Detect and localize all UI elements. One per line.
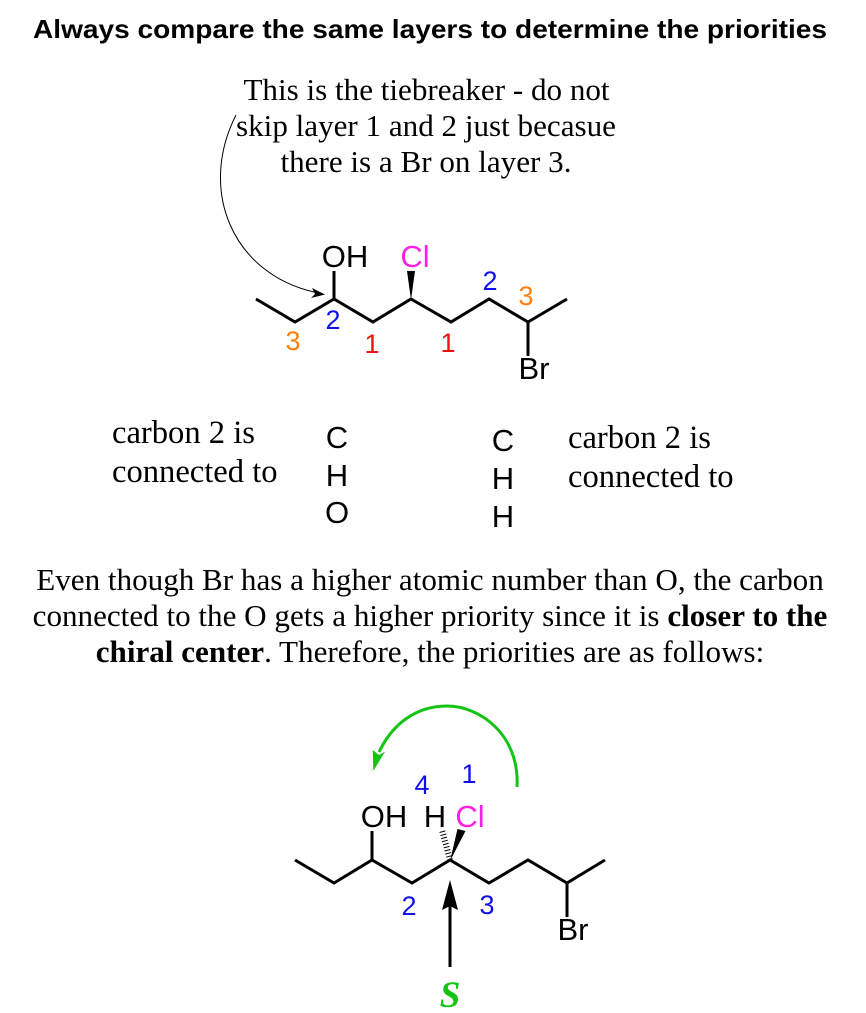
carbon skeleton	[295, 831, 605, 917]
wedge bond to Cl	[407, 271, 415, 300]
atom label: H: H	[424, 799, 446, 834]
text block: right carbon label	[568, 420, 734, 495]
text block: explanation	[33, 562, 827, 669]
text block: explanation: Even though Br has a higher atomic number than O, the carbon	[36, 562, 824, 597]
layer numbers: 3	[518, 281, 534, 311]
text block: tiebreaker note: This is the tiebreaker - do not	[243, 72, 610, 107]
atom label: OH: OH	[322, 239, 368, 274]
text block: left carbon label: carbon 2 is	[112, 415, 255, 451]
atom list: C H H: H	[492, 499, 514, 534]
arrow: green rotation arc	[373, 706, 517, 787]
text block: right carbon label: connected to	[568, 459, 734, 495]
priority numbers: 2	[401, 891, 417, 921]
wedge bond to Cl	[450, 829, 466, 861]
text block: left carbon label: connected to	[112, 454, 278, 490]
atom list: C H O: C	[326, 420, 348, 455]
atom label: Br: Br	[518, 351, 550, 386]
atom label: OH: OH	[361, 799, 407, 834]
carbon skeleton	[256, 271, 567, 356]
priority numbers: 1	[461, 759, 477, 789]
text block: explanation: chiral center. Therefore, the priorities are as follows:	[96, 634, 764, 669]
molecule: second structure with priorities	[295, 759, 605, 947]
arrow: viewing direction	[442, 880, 458, 967]
text block: left carbon label	[112, 415, 278, 490]
layer numbers: 2	[325, 305, 341, 335]
atom list: C H H: C	[492, 423, 514, 458]
priority numbers: 4	[414, 770, 430, 800]
atom list: C H H: H	[492, 461, 514, 496]
atom label: Cl: Cl	[400, 239, 430, 274]
atom list: C H O: O	[325, 495, 349, 530]
layer numbers: 1	[364, 329, 380, 359]
title: Always compare the same layers to determine the priorities	[33, 14, 827, 44]
atom label: Cl: Cl	[455, 799, 485, 834]
text block: tiebreaker note: there is a Br on layer 3.	[281, 144, 571, 179]
layer numbers: 3	[285, 326, 301, 356]
molecule: first structure with layers	[256, 239, 567, 386]
priority numbers: 3	[479, 890, 495, 920]
layer numbers: 2	[482, 266, 498, 296]
text block: right carbon label: carbon 2 is	[568, 420, 711, 456]
atom label: Br: Br	[558, 912, 588, 947]
text block: tiebreaker note	[236, 72, 616, 179]
hashed bond to H	[442, 830, 450, 860]
text block: tiebreaker note: skip layer 1 and 2 just becasue	[236, 108, 616, 143]
atom list: C H H	[492, 423, 514, 534]
atom list: C H O: H	[326, 458, 348, 493]
priority numbers	[401, 759, 495, 921]
layer numbers	[285, 266, 534, 359]
atom list: C H O	[325, 420, 349, 530]
text block: explanation: connected to the O gets a higher priority since it is closer to the	[33, 598, 827, 633]
arrow: tiebreaker to carbon	[220, 115, 325, 298]
layer numbers: 1	[440, 328, 456, 358]
